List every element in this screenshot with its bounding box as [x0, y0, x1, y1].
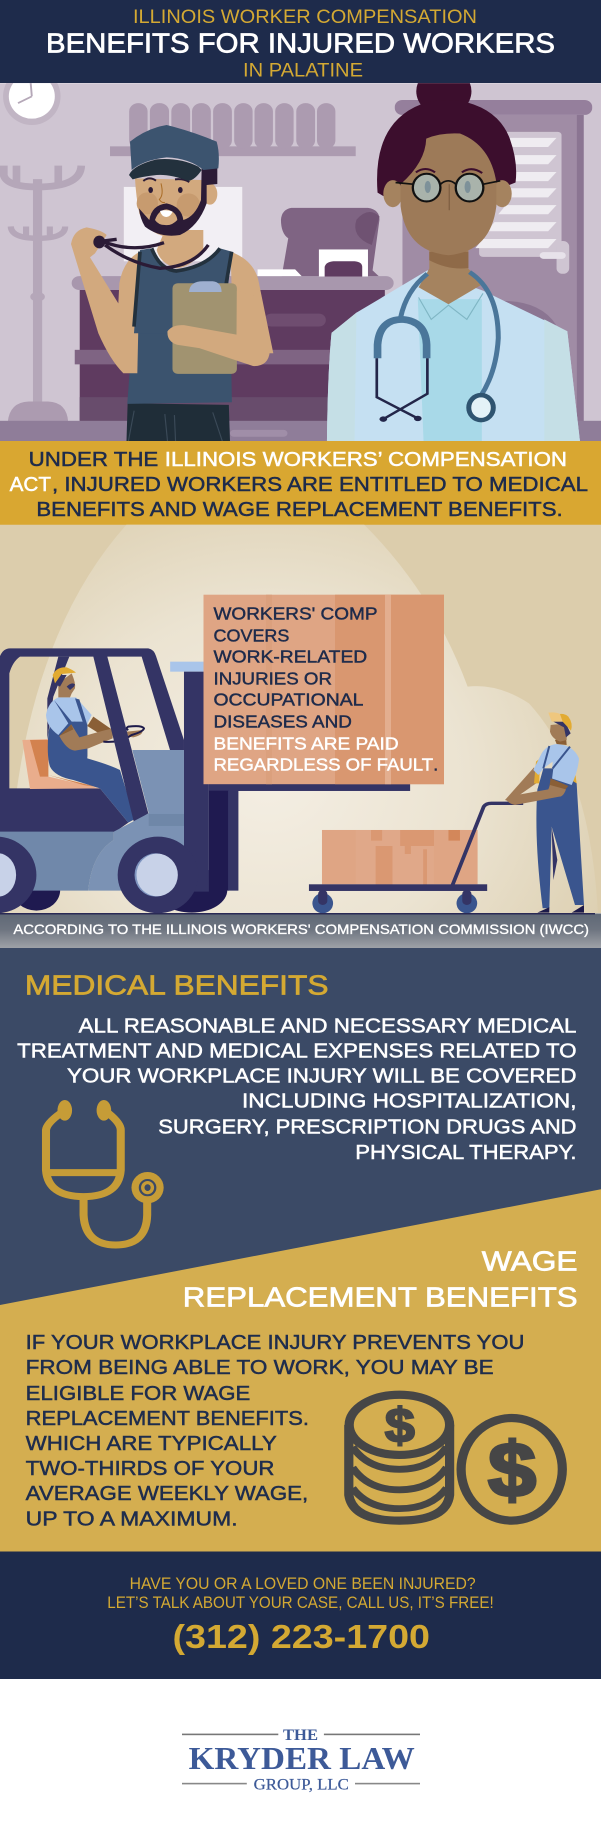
- text: benefits regardless of fault: .: [433, 755, 438, 775]
- wage benefits body text: UP TO A MAXIMUM.: [26, 1508, 238, 1531]
- wedge pillar behind driver: [47, 657, 69, 740]
- callout band: Illinois Workers' Compensation Act: [0, 441, 601, 525]
- forklift lower structure: [13, 662, 410, 913]
- wage benefits body text: TWO-THIRDS OF YOUR: [26, 1457, 274, 1480]
- icon: coins: $: [488, 1428, 536, 1514]
- shirt: [418, 299, 482, 441]
- heading: wage replacement benefits: REPLACEMENT BENEFITS: [183, 1282, 578, 1313]
- header line: in Palatine: IN PALATINE: [243, 59, 363, 81]
- medical benefits body text: ALL REASONABLE AND NECESSARY MEDICAL: [79, 1016, 576, 1038]
- neck: [419, 250, 483, 304]
- person: doctor: [327, 67, 580, 441]
- stethoscope: [401, 272, 498, 395]
- wage benefits body text: REPLACEMENT BENEFITS.: [26, 1407, 309, 1430]
- panel: call to action: [0, 1552, 601, 1679]
- icon: coins: [349, 1395, 562, 1521]
- tank top: [134, 248, 232, 333]
- text: benefits regardless of fault: BENEFITS ARE PAID: [214, 733, 399, 753]
- medical benefits body text: [17, 1016, 577, 1164]
- logo: The Kryder Law Group: KRYDER LAW: [189, 1741, 415, 1776]
- shelf with binders: [110, 103, 356, 156]
- cap: [130, 125, 219, 170]
- icon: coins: $: [385, 1399, 415, 1452]
- warehouse worker: [505, 712, 584, 913]
- stethoscope around neck: [98, 239, 208, 268]
- upper body and head: [71, 125, 273, 373]
- coat rack: [4, 166, 81, 422]
- text: workers' comp covers: DISEASES AND: [214, 711, 352, 731]
- medical benefits body text: PHYSICAL THERAPY.: [355, 1142, 576, 1164]
- panel: wage replacement benefits: [0, 1189, 601, 1552]
- floor: [0, 421, 601, 441]
- forklift cab and driver: [0, 648, 184, 832]
- text: workers' comp covers: WORK-RELATED: [214, 647, 367, 667]
- glasses: [413, 174, 483, 201]
- cab lower: [0, 788, 128, 832]
- wage benefits body text: FROM BEING ABLE TO WORK, YOU MAY BE: [26, 1356, 494, 1379]
- wage benefits body text: IF YOUR WORKPLACE INJURY PREVENTS YOU: [26, 1331, 524, 1354]
- logo: The Kryder Law Group: [182, 1727, 420, 1793]
- medical benefits body text: SURGERY, PRESCRIPTION DRUGS AND: [158, 1117, 577, 1139]
- reception desk: [72, 276, 394, 421]
- wage benefits body text: WHICH ARE TYPICALLY: [26, 1432, 277, 1455]
- wage benefits body text: ELIGIBLE FOR WAGE: [26, 1382, 250, 1405]
- source bar: [0, 913, 601, 948]
- tank top lower: [127, 297, 232, 404]
- crate text box: [204, 595, 444, 784]
- icon: wall clock: [3, 83, 60, 125]
- text: workers' comp covers: WORKERS' COMP: [214, 603, 378, 623]
- text: benefits regardless of fault: REGARDLESS OF FAULT: [214, 755, 433, 775]
- cab pillars: [0, 648, 184, 823]
- forklift wheels: [0, 837, 36, 913]
- logo: The Kryder Law Group: THE: [283, 1727, 318, 1744]
- callout band: Illinois Workers' Compensation Act: UNDER THE: [29, 448, 158, 471]
- medical benefits body text: TREATMENT AND MEDICAL EXPENSES RELATED TO: [17, 1041, 576, 1063]
- callout band: Illinois Workers' Compensation Act: ACT: [10, 473, 51, 496]
- callout band: Illinois Workers' Compensation Act: ILLINOIS WORKERS’ COMPENSATION: [165, 448, 567, 471]
- title: BENEFITS FOR INJURED WORKERS: [46, 27, 555, 58]
- heading: medical benefits: MEDICAL BENEFITS: [25, 969, 329, 1000]
- seat: [22, 739, 100, 789]
- text: workers' comp covers: [214, 603, 378, 731]
- callout band: Illinois Workers' Compensation Act: BENEFITS AND WAGE REPLACEMENT BENEFITS.: [36, 498, 563, 521]
- driver: [46, 667, 144, 823]
- text: benefits regardless of fault: [214, 733, 438, 775]
- panel: medical benefits: [0, 948, 601, 1328]
- call to action text: HAVE YOU OR A LOVED ONE BEEN INJURED?: [130, 1574, 476, 1593]
- call to action text: LET’S TALK ABOUT YOUR CASE, CALL US, IT’S FREE!: [107, 1593, 494, 1612]
- medical benefits body text: YOUR WORKPLACE INJURY WILL BE COVERED: [67, 1066, 576, 1088]
- call to action text: [107, 1574, 494, 1612]
- right shoulder: [231, 252, 273, 353]
- callout band: Illinois Workers' Compensation Act: , INJURED WORKERS ARE ENTITLED TO MEDICAL: [52, 473, 588, 496]
- source bar: ACCORDING TO THE ILLINOIS WORKERS' COMPENSATION COMMISSION (IWCC): [13, 921, 589, 937]
- clipboard and holding arm: [167, 281, 270, 374]
- heading: wage replacement benefits: [183, 1246, 578, 1313]
- forklift body: [0, 750, 198, 913]
- text: workers' comp covers: COVERS: [214, 625, 290, 645]
- raised arm and shoulder: [71, 227, 140, 373]
- box on cart: [322, 830, 478, 884]
- paper on wall: [124, 187, 242, 261]
- trousers: [126, 297, 232, 441]
- head: [135, 178, 202, 237]
- lab coat: [327, 270, 580, 441]
- illustration: warehouse forklift: [0, 525, 601, 913]
- neck: [157, 230, 203, 268]
- text: workers' comp covers: INJURIES OR: [214, 668, 332, 688]
- text: workers' comp covers: OCCUPATIONAL: [214, 690, 364, 710]
- header line: Illinois Worker Compensation: ILLINOIS WORKER COMPENSATION: [133, 6, 477, 28]
- icon: stethoscope: [46, 1100, 164, 1245]
- heading: wage replacement benefits: WAGE: [482, 1246, 578, 1277]
- medical benefits body text: INCLUDING HOSPITALIZATION,: [242, 1091, 576, 1113]
- door and window: [395, 100, 592, 422]
- head: [416, 83, 472, 104]
- hand cart: [309, 803, 523, 913]
- illustration: doctor's office: [0, 67, 601, 441]
- wage benefits body text: AVERAGE WEEKLY WAGE,: [26, 1482, 308, 1505]
- cash register: [258, 208, 379, 276]
- wage benefits body text: [26, 1331, 524, 1531]
- header banner: [0, 0, 601, 83]
- person: injured worker: [71, 125, 273, 441]
- phone number: (312) 223-1700: [172, 1619, 430, 1656]
- logo: The Kryder Law Group: GROUP, LLC: [254, 1776, 349, 1793]
